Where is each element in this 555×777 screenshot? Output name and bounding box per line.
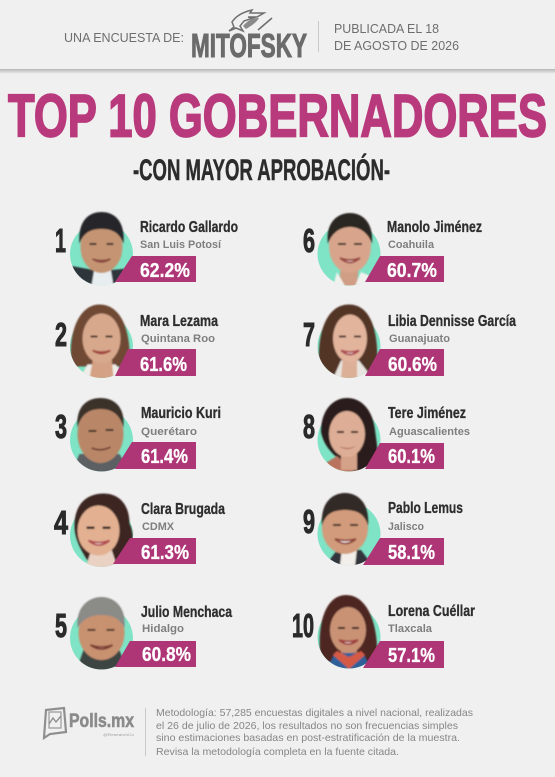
name: Mauricio Kuri (141, 405, 221, 422)
Mitofsky logo: MITOFSKY (191, 27, 307, 64)
portrait: Ricardo Gallardo (70, 212, 134, 286)
rank 3: 3 (55, 408, 67, 445)
rank 2: 2 (55, 316, 67, 353)
state: Tlaxcala (388, 623, 433, 635)
percentage bar (113, 538, 196, 564)
percentage bar (365, 256, 444, 282)
portrait: Pablo Lemus (318, 493, 380, 566)
percentage bar (115, 349, 196, 376)
methodology note: sino estimaciones basadas en post-estratificación de la muestra. (156, 732, 460, 744)
Polls.mx logo: @ResearchCo (103, 732, 135, 737)
entry 7 (303, 304, 516, 378)
name: Mara Lezama (140, 313, 218, 330)
state: Guanajuato (389, 333, 450, 345)
name: Julio Menchaca (141, 604, 232, 621)
state: Coahuila (388, 239, 435, 251)
name: Ricardo Gallardo (140, 219, 238, 236)
portrait: Tere Jiménez (318, 398, 380, 472)
percentage bar (363, 538, 444, 565)
entry 3 (55, 398, 221, 472)
rank 9: 9 (303, 503, 315, 540)
rank 10: 10 (292, 607, 314, 644)
name: Clara Brugada (141, 501, 225, 518)
percentage: 57.1% (388, 644, 435, 667)
portrait: Mara Lezama (70, 304, 133, 378)
percentage bar (365, 349, 444, 376)
rank 5: 5 (55, 607, 67, 644)
entry 6 (303, 213, 482, 286)
entry 9 (303, 493, 463, 566)
percentage bar (115, 256, 196, 282)
methodology note (156, 707, 473, 758)
percentage bar (363, 641, 444, 668)
percentage bar (115, 442, 196, 469)
portrait: Manolo Jiménez (318, 213, 380, 286)
methodology note: el 26 de julio de 2026, los resultados no son frecuencias simples (156, 720, 458, 732)
percentage: 60.6% (388, 353, 437, 376)
methodology note: Metodología: 57,285 encuestas digitales a nivel nacional, realizadas (156, 707, 473, 719)
subtitle: -CON MAYOR APROBACIÓN- (133, 153, 390, 187)
state: Hidalgo (142, 623, 184, 635)
entry 4 (54, 494, 225, 568)
survey label: UNA ENCUESTA DE: (64, 31, 184, 45)
name: Manolo Jiménez (387, 219, 482, 236)
percentage: 61.4% (141, 445, 188, 468)
portrait: Mauricio Kuri (70, 398, 133, 472)
name: Lorena Cuéllar (388, 603, 475, 620)
percentage: 60.1% (388, 445, 435, 468)
entry 5 (55, 597, 232, 670)
state: San Luis Potosí (140, 239, 222, 251)
name: Libia Dennisse García (388, 313, 516, 330)
portrait: Libia Dennisse García (318, 304, 380, 378)
rank 6: 6 (303, 222, 315, 259)
rank 8: 8 (303, 408, 315, 445)
portrait: Clara Brugada (70, 494, 133, 568)
portrait: Lorena Cuéllar (318, 595, 380, 669)
entry 2 (55, 304, 218, 378)
methodology note: Revisa la metodología completa en la fuente citada. (156, 746, 399, 758)
percentage: 60.8% (142, 643, 191, 666)
entry 1 (55, 212, 238, 286)
name: Pablo Lemus (388, 500, 463, 517)
publication date: PUBLICADA EL 18 (334, 22, 439, 36)
portrait: Julio Menchaca (70, 597, 133, 670)
percentage: 58.1% (388, 541, 435, 564)
percentage: 60.7% (387, 259, 437, 282)
percentage bar (115, 641, 196, 667)
entry 10 (292, 595, 475, 669)
state: Querétaro (141, 426, 197, 438)
publication date: DE AGOSTO DE 2026 (334, 39, 459, 53)
percentage: 61.3% (141, 541, 189, 564)
state: Aguascalientes (389, 426, 470, 438)
state: Jalisco (388, 521, 424, 533)
Polls.mx logo (44, 708, 135, 738)
percentage: 61.6% (140, 353, 187, 376)
rank 4: 4 (54, 504, 68, 541)
state: CDMX (142, 521, 175, 533)
name: Tere Jiménez (388, 405, 466, 422)
Mitofsky logo (191, 10, 307, 64)
percentage bar (365, 443, 444, 469)
entry 8 (303, 398, 470, 472)
publication date (334, 22, 459, 53)
state: Quintana Roo (141, 333, 215, 345)
Polls.mx logo: Polls.mx (69, 711, 134, 732)
percentage: 62.2% (140, 259, 190, 282)
header: survey source (64, 10, 459, 64)
rank 7: 7 (303, 316, 315, 353)
rank 1: 1 (55, 222, 66, 259)
